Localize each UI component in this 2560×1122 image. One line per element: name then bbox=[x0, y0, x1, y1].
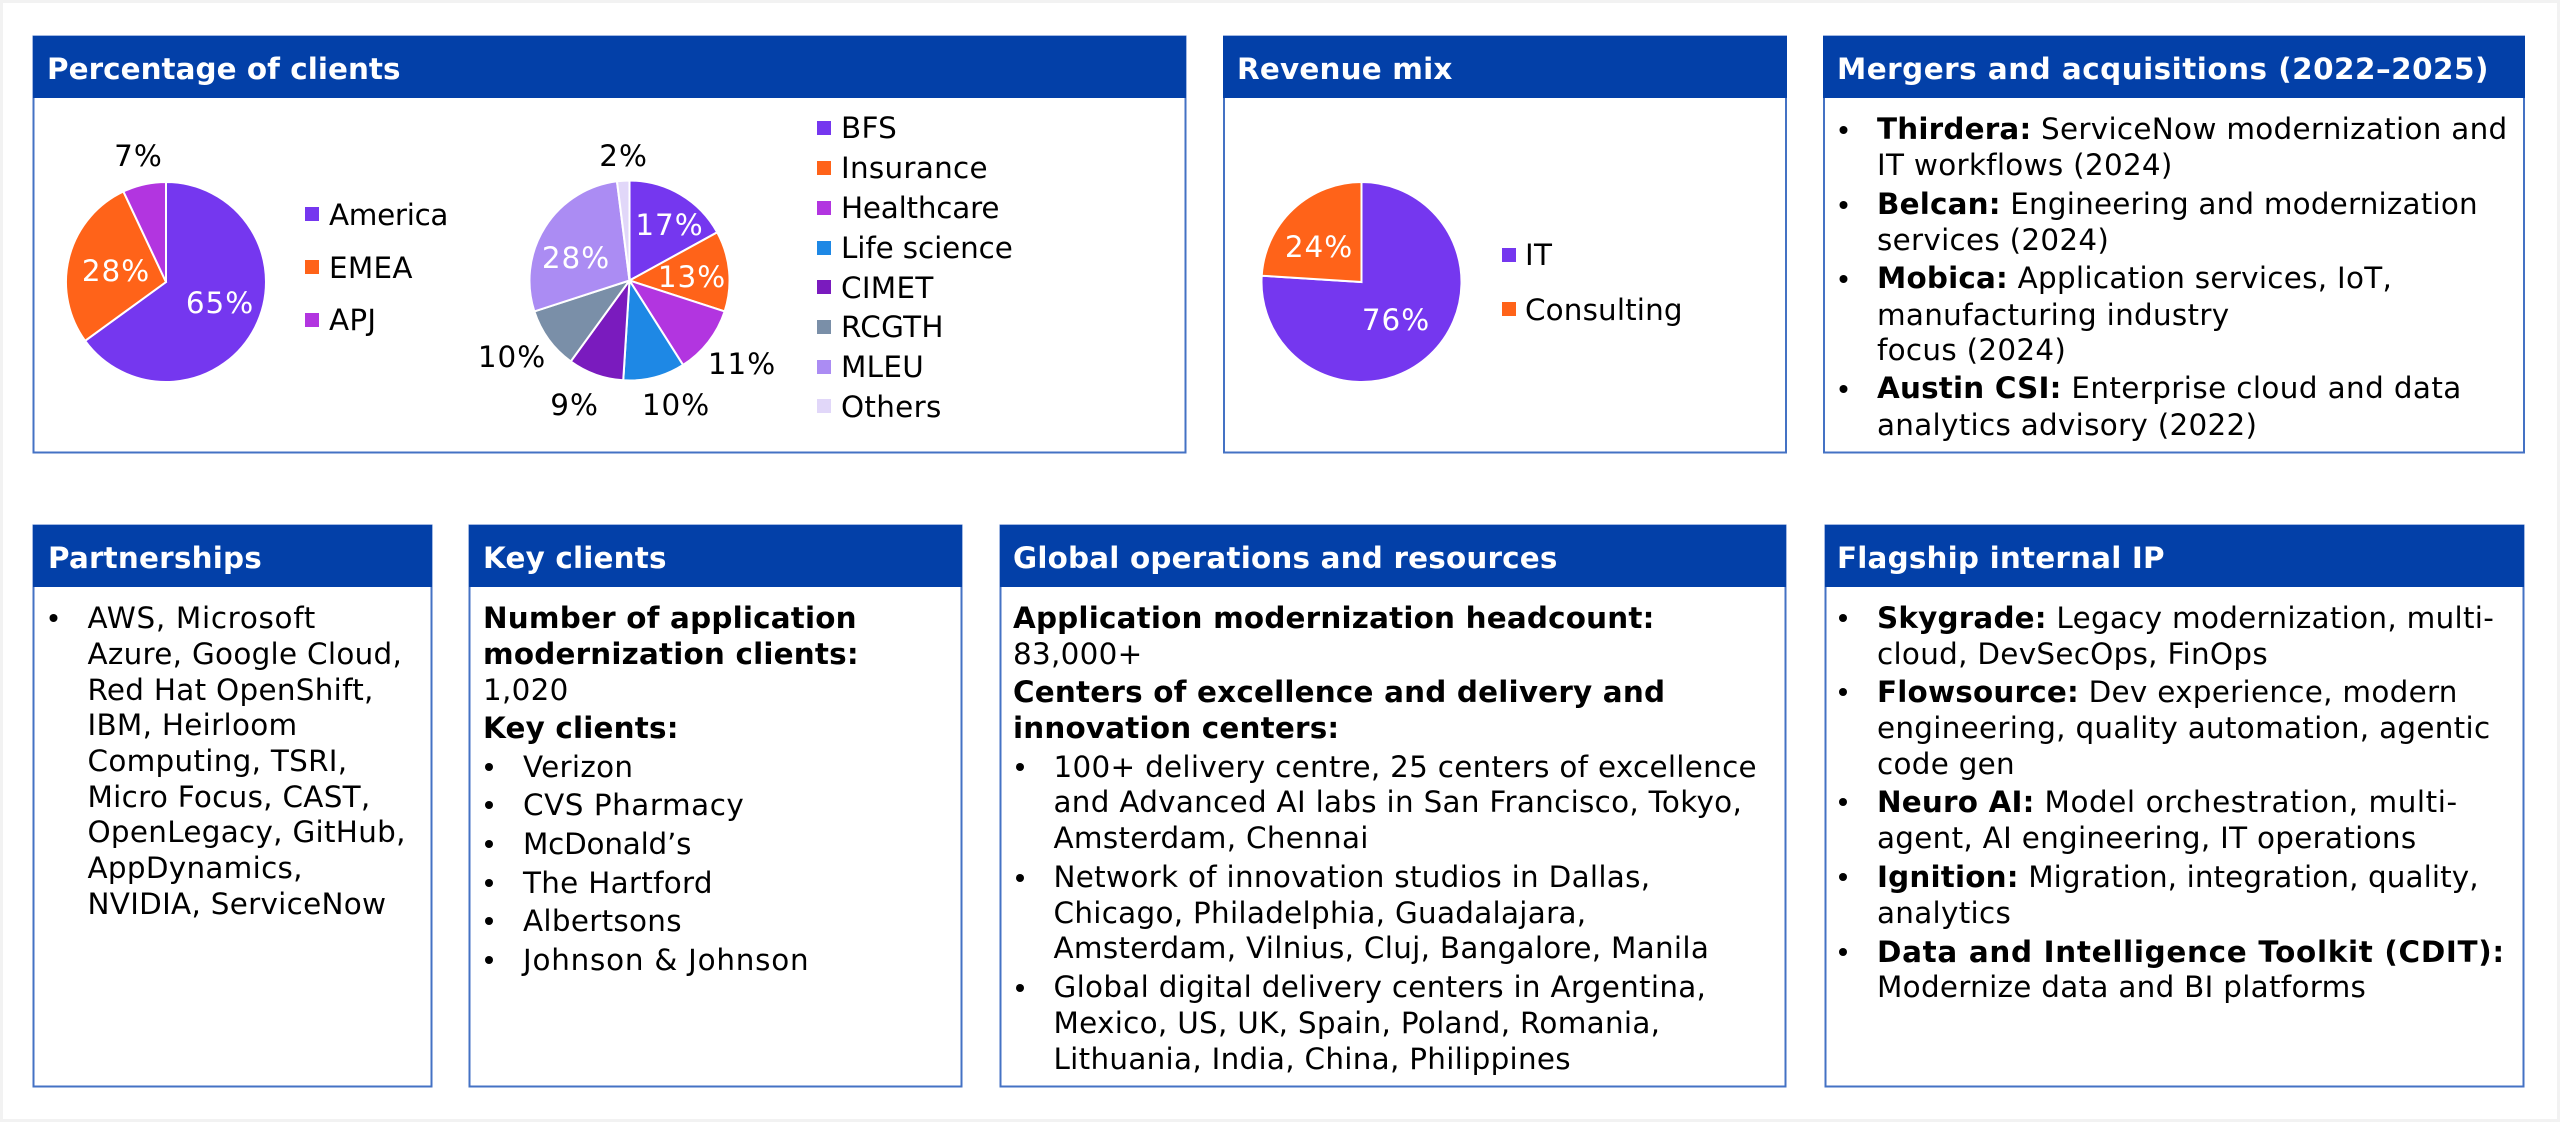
list: acquisitions: Belcan: Engineering and modernization bbox=[1877, 187, 2478, 221]
list: acquisitions: manufacturing industry bbox=[1877, 298, 2229, 332]
list: partners: OpenLegacy, GitHub, bbox=[88, 815, 406, 849]
list: partners: IBM, Heirloom bbox=[88, 708, 297, 742]
list: IP assets: Skygrade: Legacy modernization, multi- bbox=[1877, 601, 2494, 635]
heading: mergers and acquisitions bbox=[1823, 36, 2525, 98]
legend: industries: RCGTH bbox=[841, 310, 944, 344]
list: IP assets bbox=[1839, 601, 2505, 1004]
list: IP assets: Modernize data and BI platforms bbox=[1877, 970, 2366, 1004]
list: acquisitions: Thirdera: ServiceNow modernization and bbox=[1877, 112, 2508, 146]
legend: regions: EMEA bbox=[329, 251, 413, 285]
panel: percentage of clients bbox=[33, 36, 1186, 452]
legend: regions: America bbox=[329, 198, 448, 232]
pie chart: clients by industry: 2% bbox=[599, 139, 648, 173]
list: IP assets: Data and Intelligence Toolkit (CDIT): bbox=[1877, 935, 2505, 969]
list: key clients: Key clients: bbox=[483, 711, 679, 745]
legend: industries: Insurance bbox=[841, 151, 988, 185]
legend: regions bbox=[305, 198, 448, 337]
list: acquisitions: IT workflows (2024) bbox=[1877, 148, 2173, 182]
list: centers: Amsterdam, Chennai bbox=[1054, 821, 1369, 855]
text: client count: modernization clients: bbox=[483, 637, 859, 671]
list: key clients: Verizon bbox=[523, 750, 633, 784]
pie chart: revenue mix bbox=[1262, 182, 1462, 382]
list: IP assets: Neuro AI: Model orchestration, multi- bbox=[1877, 785, 2458, 819]
legend: industries bbox=[817, 111, 1013, 424]
pie chart: clients by region: 65% bbox=[186, 286, 254, 320]
heading: flagship internal IP bbox=[1825, 525, 2524, 587]
legend: industries: MLEU bbox=[841, 350, 924, 384]
text: client count: Number of application bbox=[483, 601, 857, 635]
list: key clients: CVS Pharmacy bbox=[523, 788, 744, 822]
heading: percentage of clients: Percentage of clients bbox=[47, 52, 401, 86]
panel: revenue mix bbox=[1223, 36, 1787, 452]
list: centers: Chicago, Philadelphia, Guadalajara, bbox=[1054, 896, 1586, 930]
list: partners: Computing, TSRI, bbox=[88, 744, 347, 778]
list: IP assets: Ignition: Migration, integration, quality, bbox=[1877, 860, 2479, 894]
text: client count: 1,020 bbox=[483, 673, 569, 707]
pie chart: clients by region: 7% bbox=[114, 139, 163, 173]
list: centers: Centers of excellence and delivery and bbox=[1013, 675, 1665, 709]
pie chart: clients by industry: 9% bbox=[550, 388, 599, 422]
list: acquisitions: Austin CSI: Enterprise cloud and data bbox=[1877, 371, 2462, 405]
list: acquisitions: focus (2024) bbox=[1877, 333, 2066, 367]
list: partners: Azure, Google Cloud, bbox=[88, 637, 402, 671]
pie chart: clients by industry bbox=[478, 139, 776, 422]
list: centers: Lithuania, India, China, Philippines bbox=[1054, 1042, 1571, 1076]
legend: revenue bbox=[1502, 238, 1683, 327]
legend: industries: BFS bbox=[841, 111, 897, 145]
list: partners: NVIDIA, ServiceNow bbox=[88, 887, 386, 921]
list: centers: Global digital delivery centers in Argentina, bbox=[1054, 970, 1706, 1004]
list: key clients: Johnson & Johnson bbox=[521, 943, 809, 977]
heading: global operations bbox=[1000, 525, 1786, 587]
panel: partnerships bbox=[33, 525, 432, 1086]
legend: industries: Healthcare bbox=[841, 191, 999, 225]
heading: partnerships: Partnerships bbox=[48, 541, 262, 575]
list: partners: AWS, Microsoft bbox=[88, 601, 316, 635]
list: centers bbox=[1013, 675, 1757, 1076]
panel: key clients bbox=[469, 525, 962, 1086]
heading: revenue mix: Revenue mix bbox=[1237, 52, 1453, 86]
heading: percentage of clients bbox=[33, 36, 1186, 98]
legend: revenue: IT bbox=[1525, 238, 1553, 272]
list: acquisitions: Mobica: Application services, IoT, bbox=[1877, 261, 2392, 295]
list: IP assets: Flowsource: Dev experience, modern bbox=[1877, 675, 2458, 709]
panel: mergers and acquisitions bbox=[1823, 36, 2525, 452]
list: acquisitions: analytics advisory (2022) bbox=[1877, 408, 2257, 442]
heading: revenue mix bbox=[1223, 36, 1787, 98]
list: acquisitions: services (2024) bbox=[1877, 223, 2109, 257]
list: centers: Network of innovation studios in Dallas, bbox=[1054, 860, 1650, 894]
list: centers: Mexico, US, UK, Spain, Poland, Romania, bbox=[1054, 1006, 1660, 1040]
legend: revenue: Consulting bbox=[1525, 293, 1683, 327]
heading: partnerships bbox=[33, 525, 432, 587]
list: partners: Micro Focus, CAST, bbox=[88, 780, 371, 814]
pie chart: revenue mix: 24% bbox=[1285, 230, 1353, 264]
list: centers: Amsterdam, Vilnius, Cluj, Bangalore, Manila bbox=[1054, 931, 1709, 965]
list: partners bbox=[50, 601, 406, 921]
pie chart: clients by region bbox=[66, 139, 266, 382]
panel: flagship internal IP bbox=[1825, 525, 2524, 1086]
pie chart: clients by industry: 11% bbox=[708, 347, 776, 381]
list: centers: 100+ delivery centre, 25 centers of excellence bbox=[1054, 750, 1757, 784]
list: centers: and Advanced AI labs in San Francisco, Tokyo, bbox=[1054, 785, 1742, 819]
heading: global operations: Global operations and resources bbox=[1013, 541, 1558, 575]
pie chart: clients by industry: 17% bbox=[635, 208, 704, 242]
legend: industries: Life science bbox=[841, 231, 1013, 265]
list: partners: AppDynamics, bbox=[88, 851, 303, 885]
list: key clients: Albertsons bbox=[523, 904, 682, 938]
pie chart: clients by industry: 13% bbox=[658, 260, 726, 294]
text: headcount: 83,000+ bbox=[1013, 637, 1143, 671]
heading: mergers and acquisitions: Mergers and acquisitions (2022–2025) bbox=[1837, 52, 2489, 86]
pie chart: clients by region: 28% bbox=[82, 254, 150, 288]
text: headcount bbox=[1013, 601, 1655, 671]
legend: industries: Others bbox=[841, 390, 942, 424]
pie chart: clients by industry: 28% bbox=[542, 241, 610, 275]
panel: global operations and resources bbox=[1000, 525, 1786, 1086]
pie chart: clients by industry: 10% bbox=[478, 340, 546, 374]
list: partners: Red Hat OpenShift, bbox=[88, 673, 374, 707]
list: IP assets: analytics bbox=[1877, 896, 2011, 930]
list: key clients: McDonald’s bbox=[523, 827, 691, 861]
legend: regions: APJ bbox=[329, 303, 376, 337]
heading: key clients bbox=[469, 525, 962, 587]
list: acquisitions bbox=[1840, 112, 2508, 442]
text: headcount: Application modernization headcount: bbox=[1013, 601, 1655, 635]
list: IP assets: cloud, DevSecOps, FinOps bbox=[1877, 637, 2268, 671]
list: IP assets: agent, AI engineering, IT operations bbox=[1877, 821, 2416, 855]
list: IP assets: engineering, quality automation, agentic bbox=[1877, 711, 2490, 745]
list: IP assets: code gen bbox=[1877, 747, 2015, 781]
heading: key clients: Key clients bbox=[483, 541, 667, 575]
text: client count bbox=[483, 601, 859, 707]
pie chart: revenue mix: 76% bbox=[1362, 303, 1430, 337]
list: key clients: The Hartford bbox=[522, 866, 713, 900]
list: centers: innovation centers: bbox=[1013, 711, 1339, 745]
legend: industries: CIMET bbox=[841, 271, 934, 305]
heading: flagship internal IP: Flagship internal IP bbox=[1837, 541, 2165, 575]
list: key clients bbox=[483, 711, 809, 977]
pie chart: clients by industry: 10% bbox=[642, 388, 710, 422]
